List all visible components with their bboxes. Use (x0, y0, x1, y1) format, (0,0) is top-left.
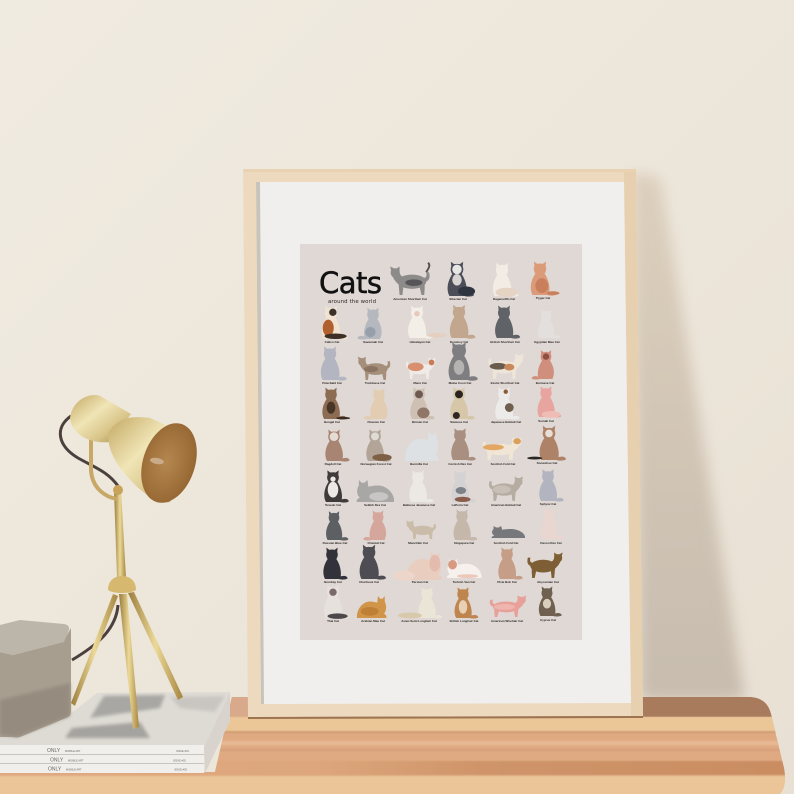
cat: Japanese Bobtail (491, 387, 521, 424)
cat: Peterbald (321, 347, 347, 385)
cat: Somali (538, 386, 561, 423)
cat: Siamese: Siamese Cat (450, 420, 468, 424)
cat: Bengal: Bengal Cat (324, 420, 340, 424)
cat: British Longhair (450, 587, 478, 623)
cat: Asian Semi Longhair: Asian Semi Longhair Cat (401, 619, 437, 623)
stem (114, 490, 126, 578)
cat: Maine Coon: Maine Coon Cat (449, 381, 471, 385)
cat: Toyger (531, 262, 560, 300)
picture frame with mat and poster (243, 169, 643, 719)
cat: Thai (324, 585, 350, 623)
cat: American Shorthair (390, 263, 430, 301)
cat: Norwegian Forest (360, 429, 392, 466)
cat: American Shorthair: American Shorthair Cat (393, 297, 427, 301)
hub (108, 576, 136, 593)
cat: Snowshoe: Snowshoe Cat (537, 461, 557, 465)
cat: Chartreux (359, 545, 386, 584)
cat: Egyptian Mau: Egyptian Mau Cat (534, 340, 560, 344)
yoke (91, 437, 117, 499)
cat: American Bobtail: American Bobtail Cat (491, 503, 521, 507)
cat: Chausie (364, 388, 387, 424)
cat: British Longhair: British Longhair Cat (450, 619, 478, 623)
cat: Pixie Bob (497, 547, 523, 584)
cat: Ragamuffin: Ragamuffin Cat (493, 297, 515, 301)
cat: Bombay: Bombay Cat (324, 580, 342, 584)
cat: Siberian (448, 262, 475, 301)
cat: Abyssinian: Abyssinian Cat (537, 580, 559, 584)
cat: British Shorthair (490, 306, 520, 344)
cat: Burmilla: Burmilla Cat (410, 462, 428, 466)
cat: Abyssinian (527, 552, 563, 584)
subtitle: around the world (328, 299, 376, 305)
cat: Munchkin (406, 520, 436, 545)
cat: Ragdoll: Ragdoll Cat (325, 462, 341, 466)
cat: Scottish Fold lying: Scottish Fold Cat (494, 541, 518, 545)
shade opening (132, 416, 206, 510)
brass tripod lamp (60, 395, 206, 729)
cat: Scottish Fold lying (492, 526, 525, 545)
cat: Donskoy: Donskoy Cat (450, 340, 468, 344)
cat: Devon Rex (540, 508, 564, 545)
cat: Calico (322, 306, 348, 344)
cat: Norwegian Forest: Norwegian Forest Cat (360, 462, 392, 466)
magazine spine text: ISSUE #03 (174, 768, 187, 772)
magazine spine text: ONLY (47, 748, 61, 754)
cat: Sphynx: Sphynx Cat (540, 502, 556, 506)
cat: Selkirk Rex: Selkirk Rex Cat (364, 503, 386, 507)
cat: Bengal (322, 388, 350, 424)
cat: Singapura (454, 509, 477, 545)
cat: Ragamuffin (493, 263, 519, 301)
cat: Balinese Javanese (403, 470, 435, 507)
cat: Maine Coon (449, 342, 478, 385)
magazine spine text: MOBILE ART (65, 749, 81, 753)
magazine spine text: MOBILE ART (68, 758, 84, 762)
cat: Burmese (532, 350, 554, 385)
lamp cord (60, 416, 118, 486)
cat: LaPerm: LaPerm Cat (452, 503, 468, 507)
concrete box (0, 620, 71, 738)
cat: Scottish Fold (482, 438, 522, 466)
cat: Munchkin: Munchkin Cat (408, 541, 428, 545)
stack of magazines (0, 692, 230, 773)
cat: Arabian Mau (357, 596, 387, 623)
cat: Turkish Van: Turkish Van Cat (453, 580, 475, 584)
cat: Scottish Fold: Scottish Fold Cat (491, 462, 515, 466)
cat: Persian: Persian Cat (412, 580, 428, 584)
cat: Savannah: Savannah Cat (363, 340, 383, 344)
cat: Exotic Shorthair: Exotic Shorthair Cat (491, 381, 519, 385)
poster sheet (300, 244, 582, 640)
magazine spine text: ISSUE #01 (176, 749, 189, 753)
cat: Bombay (323, 548, 348, 584)
cat: Egyptian Mau (534, 309, 560, 344)
cat: Tuxedo (324, 470, 349, 507)
cat: Selkirk Rex (357, 480, 394, 507)
cat: Balinese Javanese: Balinese Javanese Cat (403, 503, 435, 507)
cat: Russian Blue (323, 511, 348, 545)
cat: Oriental (363, 510, 386, 545)
cat: Cyprus (539, 586, 562, 622)
cat: Manx: Manx Cat (413, 381, 427, 385)
cat: American Wirehair (490, 595, 526, 623)
cat: Arabian Mau: Arabian Mau Cat (361, 619, 385, 623)
cat: Chausie: Chausie Cat (367, 420, 385, 424)
frame shadow on wall (632, 172, 745, 700)
cat: Cornish Rex (448, 428, 476, 466)
cat: Himalayan: Himalayan Cat (410, 340, 430, 344)
cat: Snowshoe (527, 426, 566, 465)
cat: Ragdoll (325, 430, 350, 466)
cat: Sphynx (539, 469, 564, 506)
cat: Himalayan (408, 306, 447, 344)
magazine spine text: ISSUE #02 (173, 758, 186, 762)
cat: LaPerm (451, 470, 476, 507)
cat: Birman: Birman Cat (412, 420, 428, 424)
cat: Devon Rex: Devon Rex Cat (540, 541, 562, 545)
cat: Thai: Thai Cat (327, 619, 339, 623)
cat: Burmilla (405, 431, 438, 466)
magazine spine text: ONLY (50, 758, 64, 764)
cat: Exotic Shorthair (488, 354, 524, 385)
cat: Tonkinese (358, 357, 390, 385)
cat: Singapura: Singapura Cat (454, 541, 474, 545)
cat: Persian (393, 552, 441, 584)
cat: Chartreux: Chartreux Cat (359, 580, 379, 584)
cat: Asian Semi Longhair (398, 587, 442, 623)
white mat (256, 182, 631, 704)
bulb (150, 457, 164, 465)
cat: Somali: Somali Cat (538, 419, 554, 423)
cat: American Wirehair: American Wirehair Cat (491, 619, 523, 623)
cat: Birman (410, 387, 435, 424)
cat: British Shorthair: British Shorthair Cat (490, 340, 520, 344)
cat: Calico: Calico Cat (325, 340, 339, 344)
wooden table (0, 690, 794, 794)
cat: Peterbald: Peterbald Cat (322, 381, 342, 385)
cat: Pixie Bob: Pixie Bob Cat (497, 580, 517, 584)
cat: Burmese: Burmese Cat (536, 381, 554, 385)
cat: Japanese Bobtail: Japanese Bobtail Cat (491, 420, 521, 424)
cat: Cyprus: Cyprus Cat (540, 618, 556, 622)
magazine spine text: ONLY (48, 766, 62, 772)
cat: Donskoy (450, 305, 476, 344)
cat: American Bobtail (489, 476, 523, 507)
cat: Oriental: Oriental Cat (367, 541, 385, 545)
tripod legs (71, 594, 118, 706)
cat: Siamese (450, 387, 475, 424)
magazine spine text: MOBILE ART (66, 768, 82, 772)
magazine spine text (47, 748, 189, 772)
cat: Siberian: Siberian Cat (449, 297, 467, 301)
title: Cats (319, 266, 382, 300)
shade cone (108, 417, 190, 502)
cat grid (321, 262, 566, 623)
cat: Tonkinese: Tonkinese Cat (365, 381, 385, 385)
cat: Turkish Van (447, 559, 482, 584)
cat: Savannah (357, 308, 383, 344)
cat: Manx (406, 357, 436, 385)
cat: Russian Blue: Russian Blue Cat (323, 541, 347, 545)
shade back (70, 395, 131, 442)
cat: Tuxedo: Tuxedo Cat (325, 503, 341, 507)
cat: Toyger: Tiygar Cat (536, 296, 550, 300)
cat: Cornish Rex: Cornish Rex Cat (448, 462, 472, 466)
